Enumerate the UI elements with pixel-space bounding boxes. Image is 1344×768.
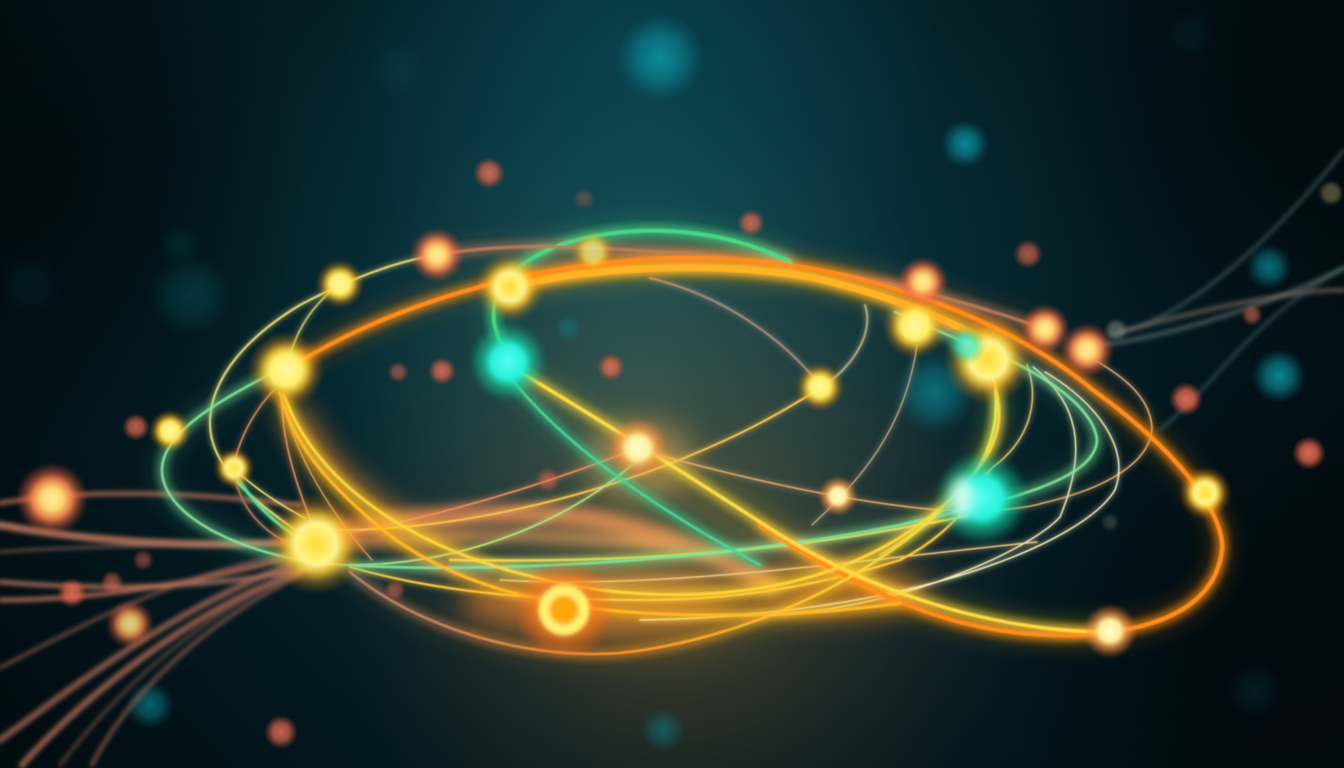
brown arc to node [650, 278, 820, 385]
yellow bottom orbit [284, 370, 999, 595]
beige chord [500, 542, 1037, 582]
glowing orange nodes [16, 228, 1137, 658]
yellow diagonal [520, 372, 1110, 632]
white orbit outer [640, 372, 1119, 620]
inner arc [880, 365, 1032, 555]
bottom brown orange loop [350, 390, 996, 654]
glowing yellow nodes [149, 230, 1231, 594]
yellow left orbit [210, 255, 437, 544]
teal green diagonal [508, 375, 760, 565]
chord lower to 820 [340, 388, 820, 530]
green orbit: left loop [162, 312, 1097, 568]
second orange top band [510, 268, 993, 345]
thin orbits [210, 255, 1152, 620]
branches below node [282, 400, 320, 540]
arc right of node [820, 305, 867, 388]
warm glow under orbits [295, 410, 930, 636]
wide orange band [330, 514, 770, 585]
main orange ring [286, 258, 1222, 635]
white orbit inner [767, 367, 1076, 615]
chord through red node [640, 360, 1152, 511]
top band beige [437, 246, 1045, 329]
thin spike [812, 345, 917, 525]
green orbit: top arc [494, 231, 790, 350]
upper branch [286, 284, 340, 370]
cyan nodes [468, 322, 1030, 546]
right strand bundle [1100, 150, 1344, 430]
small red bokeh nodes [57, 157, 1341, 749]
left strand bundle [0, 493, 320, 765]
orange ring node [514, 560, 614, 660]
bottom lines [350, 470, 990, 600]
pale chord to centre [350, 458, 640, 565]
main orbits [162, 231, 1222, 654]
chord node to centre [345, 448, 638, 534]
yellow lower sweep [280, 393, 900, 615]
